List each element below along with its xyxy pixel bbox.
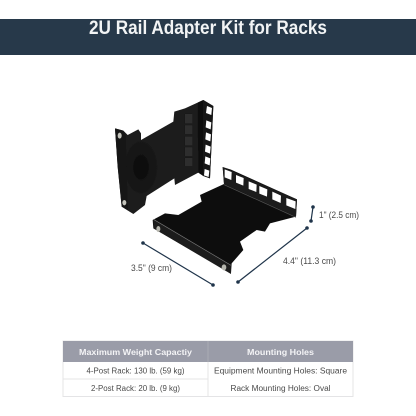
square holes: [204, 106, 212, 177]
title: 2U Rail Adapter Kit for Racks: [89, 18, 327, 39]
table header row: Mounting Holes: [247, 347, 314, 357]
table row two: Rack Mounting Holes: Oval: [230, 384, 331, 393]
header banner: [0, 18, 416, 55]
table row one: 4-Post Rack: 130 lb. (59 kg): [86, 366, 185, 376]
width label: 3.5" (9 cm): [131, 263, 172, 274]
dimension: length: [236, 226, 336, 284]
specification table: [63, 341, 353, 396]
upper bracket: [115, 100, 213, 214]
oval holes: [118, 133, 122, 139]
inner pockets: [185, 114, 192, 166]
table row two: [91, 384, 331, 393]
oval holes: [156, 226, 160, 232]
height label: 1" (2.5 cm): [319, 210, 359, 221]
table row one: [86, 366, 348, 376]
dimension: width: [131, 241, 215, 287]
dimension: height: [309, 205, 359, 223]
table row one: Equipment Mounting Holes: Square: [214, 366, 348, 376]
table row two: 2-Post Rack: 20 lb. (9 kg): [91, 384, 180, 393]
lower bracket: [153, 167, 297, 274]
table header row: [63, 341, 353, 362]
length label: 4.4" (11.3 cm): [283, 256, 336, 267]
table header row: Maximum Weight Capactiy: [79, 347, 192, 357]
square holes: [225, 169, 296, 209]
